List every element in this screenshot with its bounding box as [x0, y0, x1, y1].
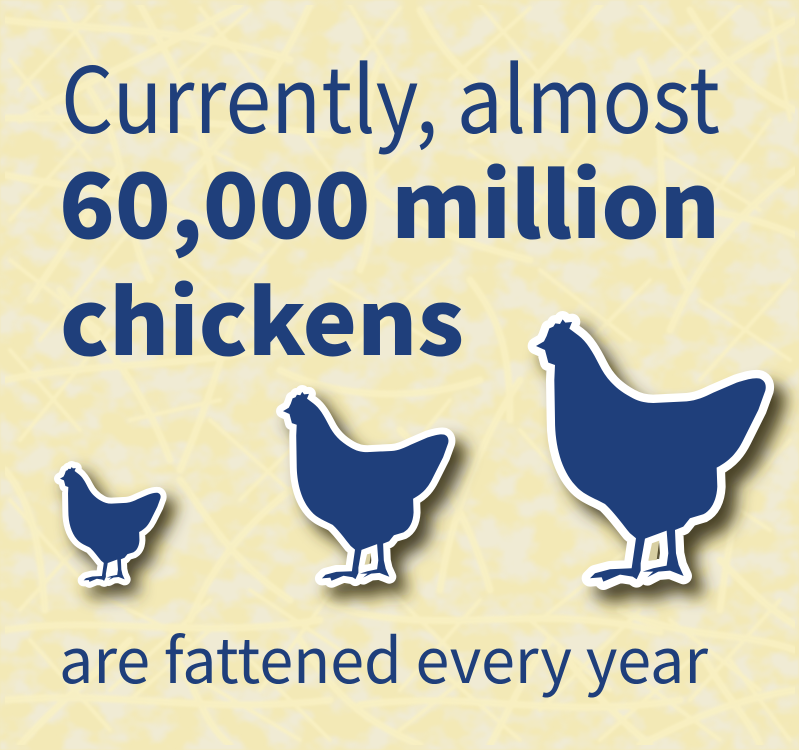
heading line: 60,000 million: 60,000 million — [59, 134, 720, 264]
icon: small chicken — [60, 467, 170, 592]
footer text: are fattened every year — [59, 611, 709, 701]
heading — [59, 28, 720, 381]
icon: medium chicken — [283, 392, 459, 593]
heading line: Currently, almost: Currently, almost — [61, 28, 720, 160]
heading line: chickens: chickens — [60, 251, 464, 381]
icon: large chicken — [536, 319, 778, 595]
